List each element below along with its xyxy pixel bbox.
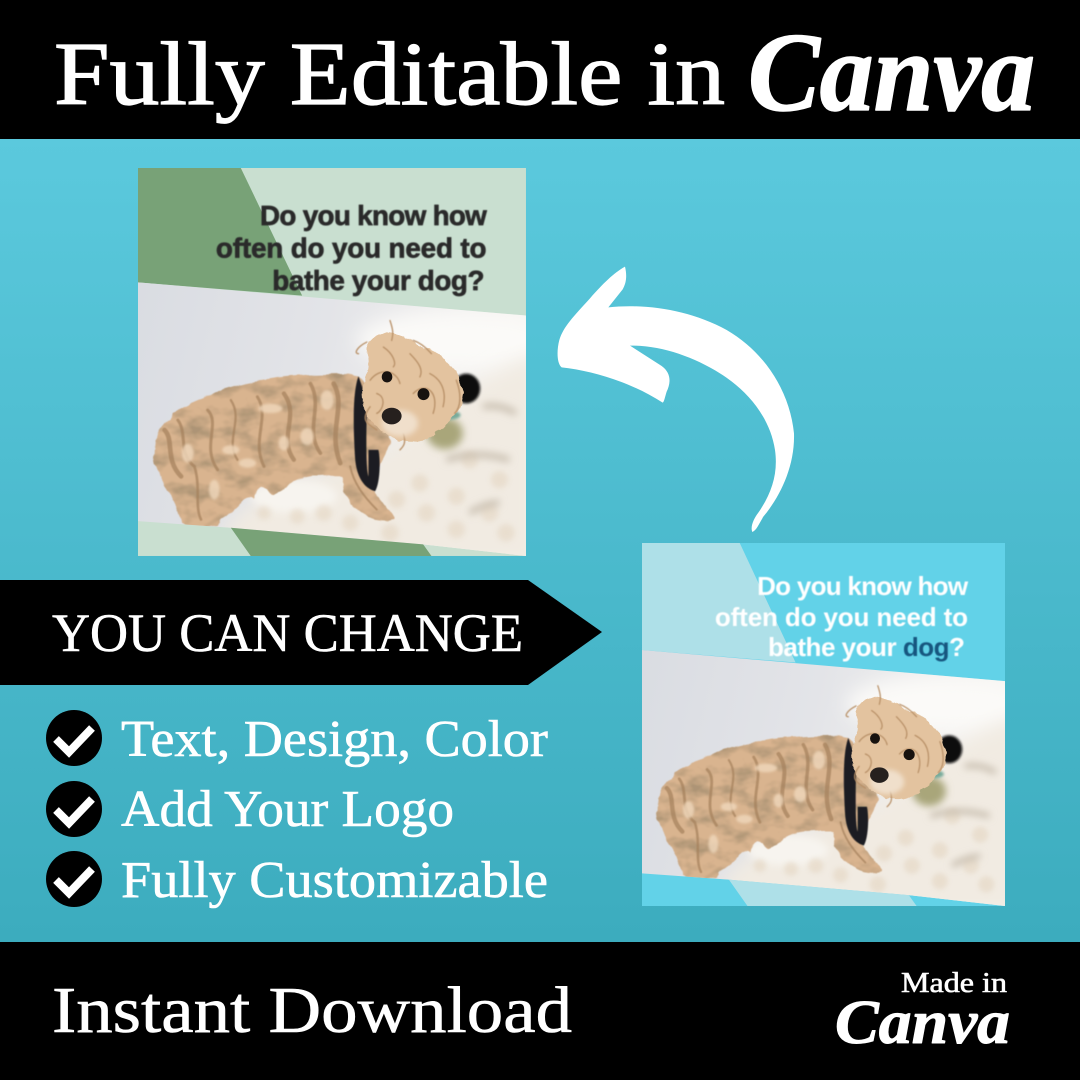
card heading: Do you know how [757,571,969,601]
card heading: bathe your dog? [272,265,485,296]
background [0,139,1080,943]
instant download: Instant Download [52,974,572,1047]
card heading [216,200,487,296]
header banner [0,0,1080,139]
made in canva logo: Canva [835,989,1010,1057]
card heading [715,571,969,662]
photo: wet dog [138,168,556,566]
card heading: often do you need to [216,233,487,264]
photo: wet dog [642,543,1033,915]
panel: blue template card [642,543,1033,915]
icon: check 1 [46,710,102,766]
list item: fully customizable: Fully Customizable [121,852,548,909]
icon: check 3 [46,851,102,907]
made in canva logo: Made in [901,967,1008,999]
list item: text, design, color: Text, Design, Color [121,711,548,768]
icon: check 2 [46,781,102,837]
arrow [558,267,794,532]
title: Canva wordmark: Canva [748,11,1035,135]
card heading: often do you need to [715,602,968,632]
title: Fully Editable in: Fully Editable in [54,25,725,124]
footer banner [0,942,1080,1080]
card heading: bathe your dog? [768,632,965,662]
panel: green template card [138,168,556,566]
card heading: Do you know how [260,200,487,231]
ribbon: you can change: YOU CAN CHANGE [52,603,523,663]
ribbon: you can change [0,580,602,685]
list item: add your logo: Add Your Logo [121,781,454,838]
checklist [46,710,548,909]
